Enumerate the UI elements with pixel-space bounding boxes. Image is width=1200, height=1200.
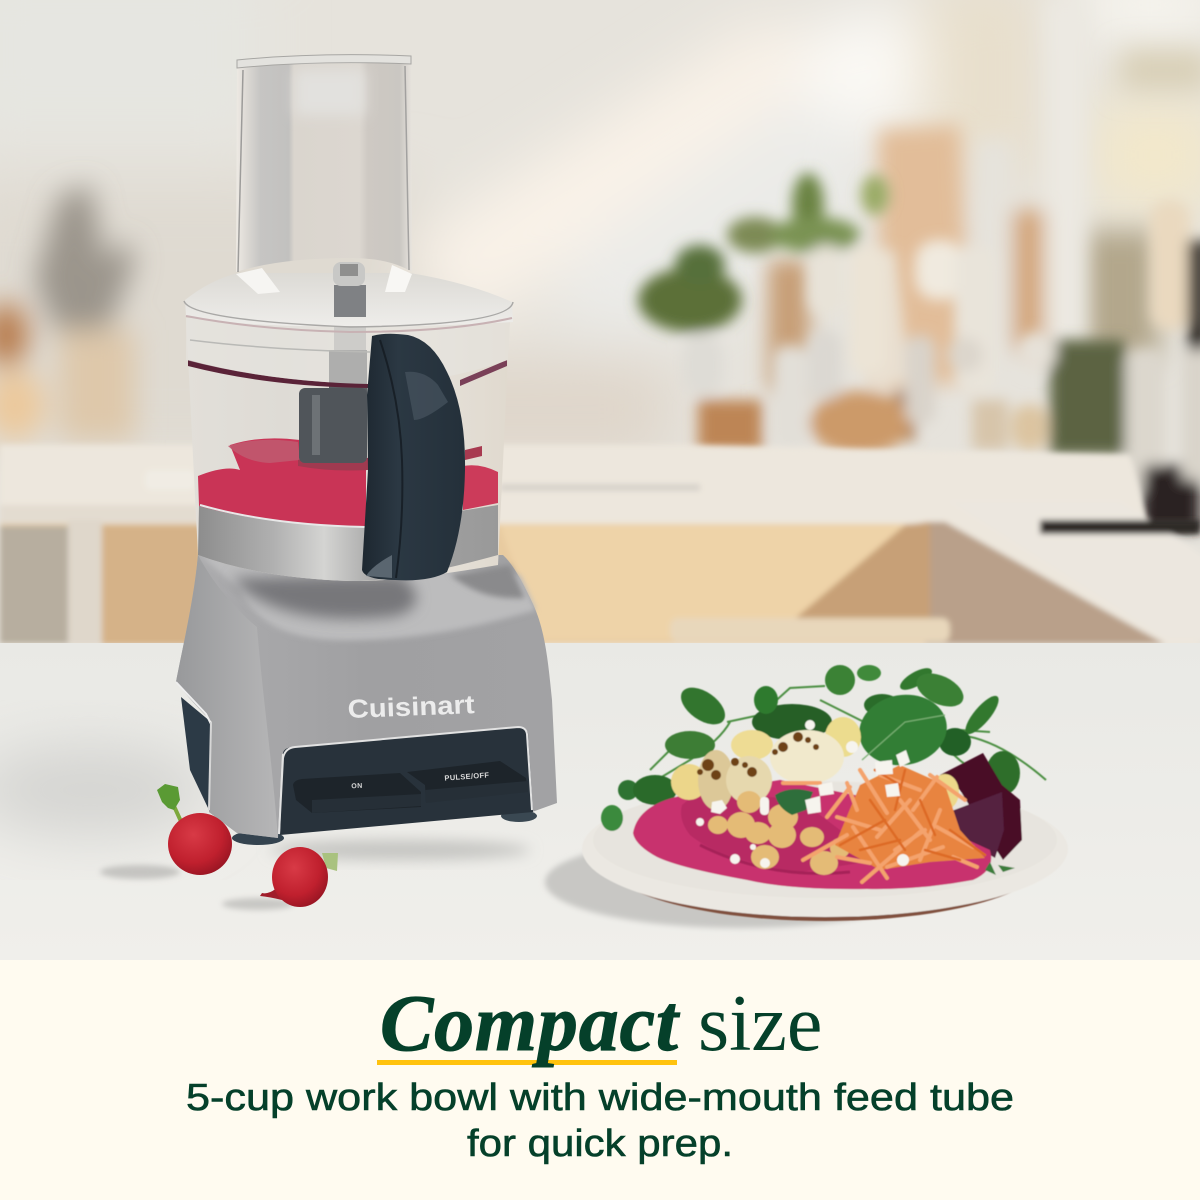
- countertop: [0, 643, 1200, 960]
- beet hummus: [633, 780, 991, 889]
- carrot shreds: [783, 765, 985, 882]
- plate: [582, 781, 1068, 921]
- feed tube: [236, 55, 412, 272]
- title: size: [698, 980, 822, 1068]
- button: ON: ON: [351, 783, 363, 790]
- white bokeh items: [808, 245, 844, 315]
- pots: [698, 400, 762, 452]
- control panel recess: [279, 727, 533, 835]
- plants: [638, 268, 742, 332]
- subtitle: for quick prep.: [467, 1123, 733, 1165]
- handle: [362, 334, 465, 580]
- basil leaf: [775, 789, 813, 815]
- shelf boards: [768, 0, 1087, 400]
- small leaf on plate: [985, 862, 1015, 875]
- beets: [940, 753, 1022, 860]
- radish: left: [157, 784, 232, 875]
- silver collar inside bowl: [198, 505, 498, 581]
- button: PULSE/OFF: [407, 761, 528, 803]
- beet puree: [198, 438, 498, 526]
- chickpeas: [708, 791, 850, 875]
- purple fill line: [188, 360, 370, 388]
- feta crumbles: [696, 720, 910, 868]
- blurred kitchen background: [0, 0, 1200, 660]
- radish: right: [260, 847, 338, 907]
- base: silver housing: [176, 555, 557, 838]
- cauliflower: [671, 717, 959, 810]
- title: Compact: [380, 980, 681, 1068]
- button: PULSE/OFF: PULSE/OFF: [444, 770, 490, 783]
- greens: [601, 664, 1046, 831]
- food processor: [176, 55, 557, 845]
- base: dark foot: [181, 697, 537, 845]
- lid: [184, 262, 513, 332]
- brand logo: Cuisinart: [347, 689, 476, 724]
- title underline: [377, 1060, 677, 1065]
- plate with beet hummus bowl: [582, 664, 1068, 921]
- blade stem: [299, 318, 367, 463]
- caption panel: [0, 960, 1200, 1200]
- work bowl: [186, 318, 510, 581]
- subtitle: 5-cup work bowl with wide-mouth feed tube: [186, 1077, 1014, 1119]
- bowl rim: [186, 318, 510, 384]
- plate shadow: [545, 836, 935, 928]
- subtitle: [186, 1077, 1014, 1165]
- button: ON: [293, 773, 421, 813]
